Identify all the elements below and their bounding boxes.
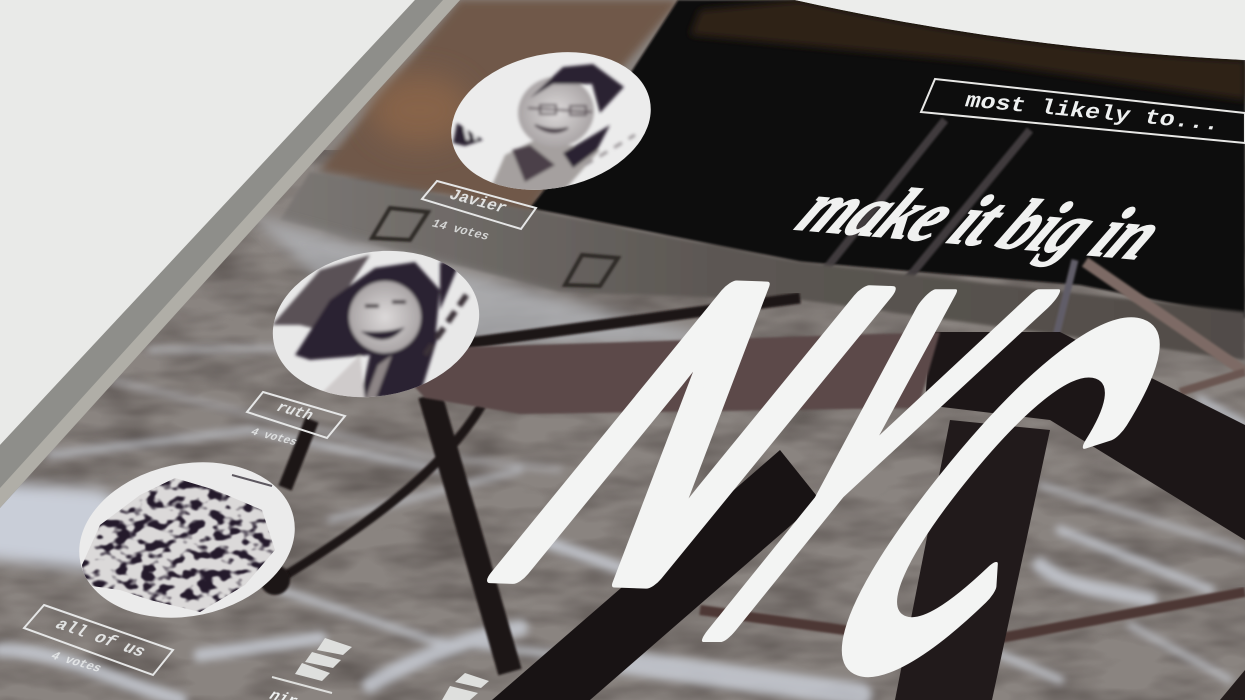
title box: most likely to...: most likely to... [962, 90, 1223, 137]
window struts [825, 120, 1030, 282]
brown lintel [690, 0, 1245, 100]
label: Javier: Javier [445, 186, 511, 217]
thin dark rail [462, 298, 800, 344]
votes: ruth: 4 votes [248, 427, 299, 449]
headline: make it big in: make it big in [782, 168, 1180, 275]
label: Javier [422, 181, 536, 229]
right hand struts [1055, 260, 1245, 392]
portrait: ruth [272, 250, 480, 398]
votes: Javier: 14 votes [429, 217, 492, 243]
label: ruth [247, 392, 345, 438]
furniture rust rod [700, 592, 1245, 640]
main vertical leg [895, 420, 1050, 700]
letter N: N [404, 201, 980, 666]
bar icon: next entry [272, 638, 352, 693]
brown bentwood rail [410, 332, 940, 414]
label: ruth: ruth [272, 399, 317, 424]
dark opening [530, 0, 1245, 318]
brush lettering: NYC [404, 197, 1245, 700]
large diagonal leg [492, 450, 820, 700]
top right page white [795, 0, 1245, 60]
stone ledge [280, 172, 1245, 360]
dark bentwood curve [925, 332, 1245, 540]
large snow patch [0, 476, 116, 578]
magazine page edge [0, 0, 460, 510]
label: all of us: all of us [50, 616, 150, 662]
brick wall [320, 0, 680, 212]
label: all of us [24, 605, 173, 675]
bar icon: lower entry [442, 673, 489, 700]
title box: most likely to... [921, 79, 1245, 143]
votes: all of us: 4 votes [48, 650, 104, 675]
snow streaks [0, 348, 1245, 700]
portrait: Javier [451, 52, 651, 190]
portrait: all of us [79, 462, 295, 618]
lower corner leg [1220, 670, 1245, 700]
ledge brackets [372, 208, 618, 286]
furniture thin legs [270, 395, 510, 672]
